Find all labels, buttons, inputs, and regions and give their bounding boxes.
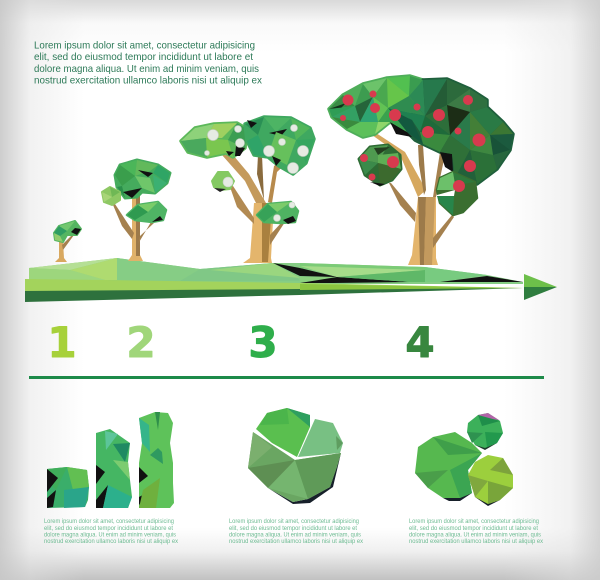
intro text: dolore magna aliqua. Ut enim ad minim veniam, quis [34,64,259,75]
bar 3 [139,412,174,508]
intro text [34,40,262,86]
canopy [329,76,423,137]
blossoms [204,124,308,222]
tree 1 [54,221,81,262]
caption: pie chart: Lorem ipsum dolor sit amet, consectetur adipisicing [229,519,359,525]
tree 4 [329,76,513,265]
caption: pie chart [229,519,363,545]
caption: circles chart: nostrud exercitation ullamco laboris nisi ut aliquip ex [409,539,543,545]
step numbers: 3 [248,318,278,367]
bar chart [47,412,174,508]
caption: pie chart: dolore magna aliqua. Ut enim ad minim veniam, quis [229,532,361,538]
lower left lobe [359,145,401,185]
step numbers: 4 [405,318,435,367]
bar 2 [96,429,132,508]
lower right lobe [437,172,477,215]
intro text: Lorem ipsum dolor sit amet, consectetur adipisicing [34,40,255,52]
tree 3 [181,117,314,263]
caption: bar chart: Lorem ipsum dolor sit amet, consectetur adipisicing [44,519,174,525]
arrowhead [524,274,557,300]
caption: pie chart: nostrud exercitation ullamco laboris nisi ut aliquip ex [229,539,363,545]
step numbers: 1 [47,318,77,367]
circles chart [415,413,513,506]
caption: circles chart: elit, sed do eiusmod tempor incididunt ut labore et [409,526,538,532]
bar 1 [47,467,89,508]
pie chart [248,408,343,504]
intro text: nostrud exercitation ullamco laboris nisi ut aliquip ex [34,76,262,86]
step numbers: 2 [126,318,156,367]
apples [340,90,486,192]
caption: circles chart: Lorem ipsum dolor sit amet, consectetur adipisicing [409,519,539,525]
caption: circles chart [409,519,543,545]
ground and timeline arrow [25,258,557,302]
intro text: elit, sed do eiusmod tempor incididunt ut labore et [34,52,253,63]
step numbers [47,318,435,367]
tree 2 [102,160,170,261]
caption: pie chart: elit, sed do eiusmod tempor incididunt ut labore et [229,526,357,532]
caption: bar chart [44,519,178,545]
caption: bar chart: elit, sed do eiusmod tempor incididunt ut labore et [44,526,173,532]
trunk [408,197,438,265]
caption: bar chart: dolore magna aliqua. Ut enim ad minim veniam, quis [44,532,176,538]
divider rule [29,376,544,379]
caption: circles chart: dolore magna aliqua. Ut enim ad minim veniam, quis [409,532,541,538]
caption: bar chart: nostrud exercitation ullamco laboris nisi ut aliquip ex [44,539,178,545]
